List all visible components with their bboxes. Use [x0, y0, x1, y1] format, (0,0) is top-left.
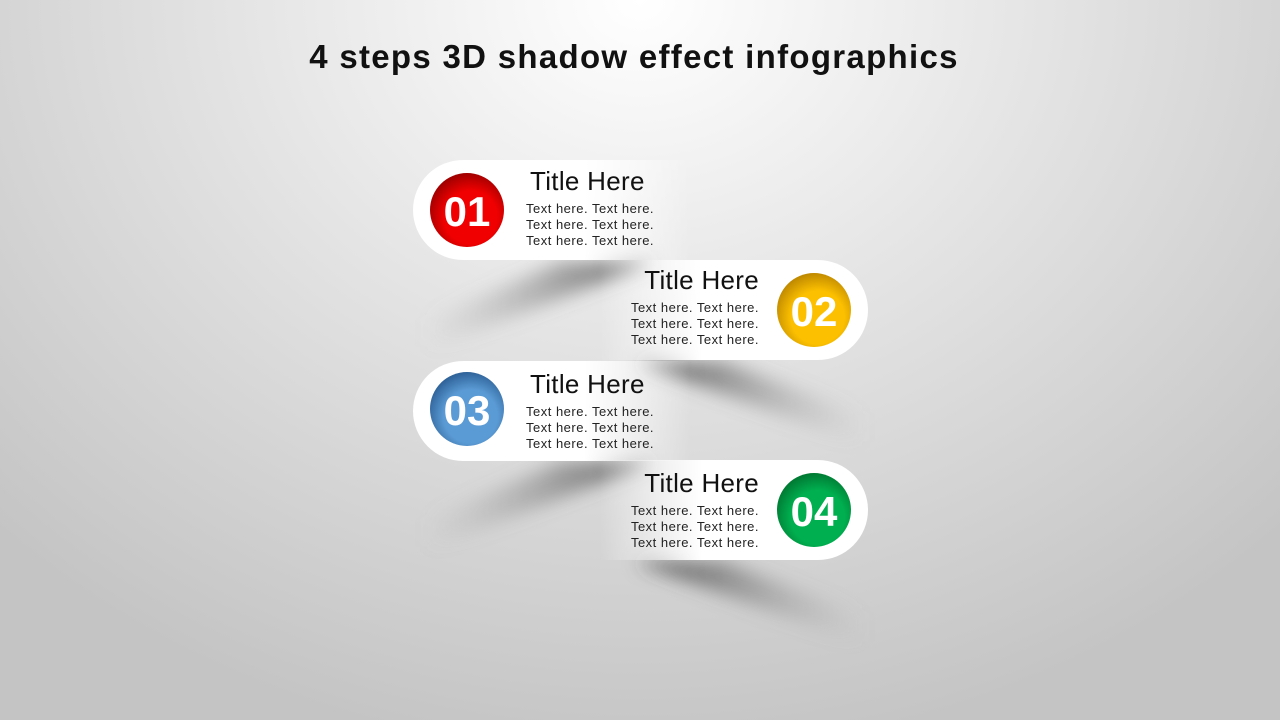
step 3: Text here. Text here.	[526, 404, 654, 419]
shadow: step 4	[635, 562, 865, 645]
shadow: step 3	[425, 462, 655, 550]
step 1	[413, 160, 690, 260]
step 1: Text here. Text here.	[526, 217, 654, 232]
step 3	[413, 361, 690, 461]
step 3: 03	[444, 387, 490, 434]
step 4: Title Here	[644, 468, 759, 498]
step 2: Title Here	[644, 265, 759, 295]
step 4: Text here. Text here.	[631, 535, 759, 550]
step 2: Text here. Text here.	[631, 316, 759, 331]
step 2	[600, 260, 868, 360]
step 3: Text here. Text here.	[526, 420, 654, 435]
step 4	[600, 460, 868, 560]
step 3: Text here. Text here.	[526, 436, 654, 451]
step 2: Text here. Text here.	[631, 300, 759, 315]
step 4: 04	[791, 488, 838, 535]
step 1: Text here. Text here.	[526, 233, 654, 248]
step 2: Text here. Text here.	[631, 332, 759, 347]
step 1: Title Here	[530, 166, 645, 196]
shadow: step 1	[425, 262, 655, 350]
step 4: Text here. Text here.	[631, 519, 759, 534]
shadow: step 2	[635, 362, 865, 445]
step 1: 01	[444, 188, 490, 235]
step 2: 02	[791, 288, 837, 335]
step 3: Title Here	[530, 369, 645, 399]
step 1: Text here. Text here.	[526, 201, 654, 216]
title: 4 steps 3D shadow effect infographics	[309, 38, 959, 75]
step 4: Text here. Text here.	[631, 503, 759, 518]
